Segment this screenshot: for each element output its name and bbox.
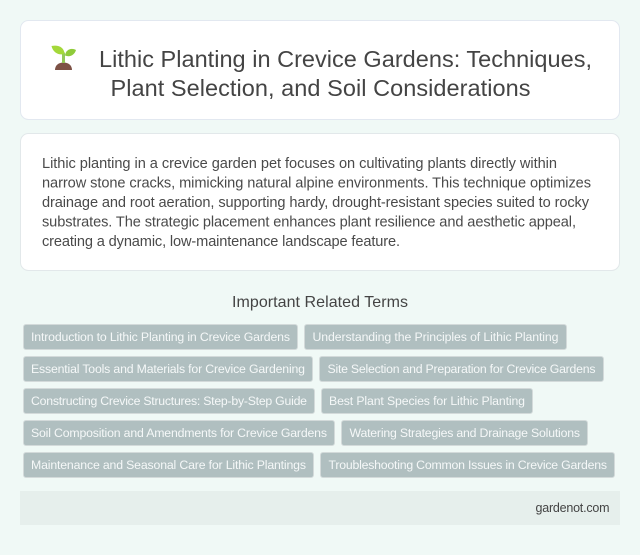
title [99, 46, 592, 101]
tag [320, 356, 604, 382]
tag: Maintenance and Seasonal Care for Lithic Plantings [31, 458, 306, 472]
tag: Soil Composition and Amendments for Crevice Gardens [31, 426, 327, 440]
tag: Essential Tools and Materials for Crevice Gardening [31, 362, 305, 376]
panel: title card [20, 20, 620, 120]
panel: description card [20, 134, 620, 270]
footer bar [20, 491, 620, 525]
text block: description: Lithic planting in a crevice garden pet focuses on cultivating plants directly within [42, 156, 557, 172]
tag: Understanding the Principles of Lithic Planting [312, 330, 559, 344]
footer source text: gardenot.com [536, 501, 610, 515]
tag list [24, 324, 614, 478]
tag [24, 356, 312, 382]
text block: description [42, 156, 591, 250]
tag: Site Selection and Preparation for Crevice Gardens [328, 362, 596, 376]
tag: Troubleshooting Common Issues in Crevice Gardens [328, 458, 607, 472]
tag: Introduction to Lithic Planting in Crevice Gardens [31, 330, 290, 344]
title: Lithic Planting in Crevice Gardens: Techniques, [99, 46, 592, 72]
tag [320, 452, 614, 478]
text block: description: narrow stone cracks, mimicking natural alpine environments. This technique optimizes [42, 176, 591, 192]
tag: Constructing Crevice Structures: Step-by-Step Guide [31, 394, 307, 408]
text block: description: drainage and root aeration, supporting hardy, drought-resistant species suited to rocky [42, 195, 590, 211]
title: Plant Selection, and Soil Considerations [110, 75, 530, 101]
tag: Watering Strategies and Drainage Solutions [350, 426, 580, 440]
text block: description: substrates. The strategic placement enhances plant resilience and aesthetic appeal, [42, 214, 576, 230]
tag [342, 420, 588, 446]
tag: Best Plant Species for Lithic Planting [329, 394, 525, 408]
tag [24, 324, 298, 350]
tag [24, 420, 334, 446]
tag [322, 388, 532, 414]
tag [304, 324, 566, 350]
heading: important related terms: Important Related Terms [232, 294, 408, 311]
tag [24, 452, 314, 478]
icon: seedling [52, 46, 76, 70]
tag [24, 388, 314, 414]
text block: description: creating a dynamic, low-maintenance landscape feature. [42, 234, 400, 250]
